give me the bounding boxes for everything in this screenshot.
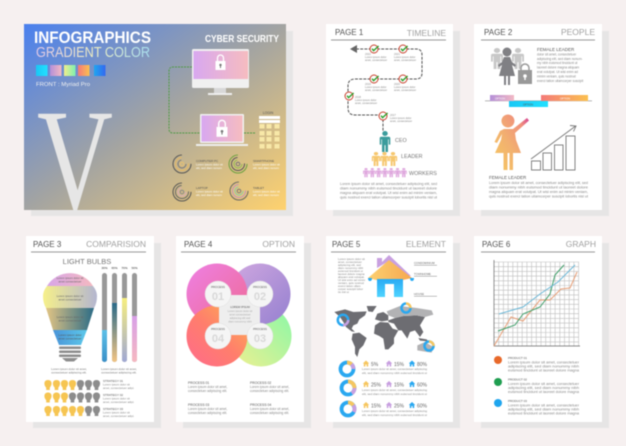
strategy text: amet, consectetuer adipi. [103, 386, 134, 390]
stats row 2: 60% [417, 382, 428, 388]
strategy text: STRATEGY 01 [103, 379, 123, 383]
device item: tablet: Lorem ipsum dolor sit [253, 190, 280, 194]
subtitle: GRADIENT COLOR [36, 45, 150, 61]
timeline captions: Lorem ipsum dolor [394, 85, 416, 89]
heading: light bulbs: LIGHT BULBS [63, 257, 111, 266]
timeline captions: amet, consectetuer [394, 58, 416, 62]
panel: page 2 people [474, 24, 609, 216]
text: female leader caption: magna aliquam erat volutpat. Ut wisi enim ad minim veniam, [489, 190, 588, 194]
text: chart captions [51, 367, 137, 374]
text: chart captions: consectetuer adipiscing elit. [51, 370, 87, 374]
legend: product 03: PRODUCT 03 [508, 399, 527, 403]
text: process 02: consectetuer adipiscing elit. [250, 389, 289, 393]
donut chart: row 3 [342, 402, 355, 416]
four-petal diagram: Lorem ipsum dolor sit [228, 309, 253, 313]
vertical bar chart: 65% [111, 266, 118, 270]
text: female leader: FEMALE LEADER [537, 47, 575, 52]
timeline captions: Lorem ipsum dolor [355, 98, 377, 102]
house labels: TOWNHOME [414, 272, 431, 276]
icon: leader figures [372, 152, 397, 166]
text column: corper suscipit lobor [338, 287, 363, 291]
timeline captions [355, 52, 416, 123]
stats row 1: Lorem ipsum dolor sit amet, consectetuer adipiscing [362, 367, 427, 371]
stats row 2: Lorem ipsum dolor sit amet, consectetuer adipiscing [362, 388, 427, 392]
text block [340, 182, 437, 200]
text column: laoreet dolore magna [338, 272, 365, 276]
text column: exerci tation ullam [338, 284, 361, 288]
text column: diam nonummy nibh [338, 266, 364, 270]
timeline captions: amet, consectetuer [394, 88, 416, 92]
device item: computer pc: Lorem ipsum dolor sit [196, 162, 223, 166]
text: process 03: Lorem ipsum dolor sit amet, [188, 407, 227, 411]
timeline captions: 2018 [355, 95, 361, 99]
legend: product 03: Lorem ipsum dolor sit amet, consectetuer [508, 404, 580, 408]
legend: product 02: Lorem ipsum dolor sit amet, consectetuer [508, 382, 580, 386]
timeline captions: 2021 [394, 52, 400, 56]
four-petal diagram: adipiscing elit sed [230, 316, 251, 320]
device item: computer pc [173, 155, 223, 173]
option bars: OPTION [495, 96, 505, 100]
bulb chart: amet consectetuer [58, 298, 82, 302]
legend: product 01: euismod tincidunt ut laoreet dolore magna [508, 368, 579, 372]
stats row 3: 25% [394, 404, 405, 410]
legend: product 01: Lorem ipsum dolor sit amet, consectetuer [508, 360, 580, 364]
timeline path [348, 49, 422, 131]
heading: graph: GRAPH [566, 239, 596, 249]
colour swatches [36, 65, 106, 76]
timeline captions: 2020 [394, 82, 400, 86]
timeline captions: 2022 [365, 52, 371, 56]
vertical bar chart [101, 266, 138, 362]
text column: aliquam erat volutpat. [338, 275, 365, 279]
text: female leader: my nibh euismod tincidunt ut [537, 61, 578, 65]
stats row 1 [362, 360, 428, 375]
text column: veniam, quis nostrud [338, 281, 364, 285]
icon: female leader group [491, 48, 532, 85]
legend: product 02: euismod tincidunt ut laoreet dolore magna [508, 390, 579, 394]
device item: computer pc: elit, sed diam nonum [196, 166, 222, 170]
text: process 03 [188, 403, 227, 415]
vertical bar chart: 30% [101, 266, 108, 270]
stats row 2: 15% [394, 382, 405, 388]
stats row 3: 15% [371, 404, 382, 410]
dashed connectors [169, 67, 256, 133]
process node 02: PROCESS [253, 285, 267, 289]
panel: page 6 graph [474, 236, 609, 428]
line chart [494, 260, 580, 346]
font note: FRONT : Myriad Pro [36, 82, 90, 88]
icon: laptop [196, 114, 248, 146]
option bars: OPTION [523, 102, 533, 106]
heading: page 3: PAGE 3 [33, 240, 62, 249]
house labels: CONDOMINIUM [414, 261, 435, 265]
process node 02: 02 [254, 291, 266, 303]
stats row 3 [362, 402, 428, 417]
process node 03: PROCESS [253, 327, 267, 331]
panel: page 1 timeline [326, 24, 460, 216]
option bars [485, 95, 592, 107]
text block: Lorem ipsum dolor sit amet, consectetuer adipiscing elit, sed [340, 182, 437, 186]
label: ceo: CEO [395, 138, 407, 144]
stats row 3: elit, sed diam nonummy nibh euismod tincidunt ut [362, 413, 427, 417]
four-petal diagram: LOREM IPSUM [230, 305, 250, 309]
bulb chart: amet consectetuer [58, 280, 82, 284]
four-petal diagram [186, 264, 292, 366]
legend: product 03: euismod tincidunt ut laoreet dolore magna [508, 412, 579, 416]
text: female leader caption: Lorem ipsum dolor sit amet, consectetuer adipiscing elit, sed [489, 181, 588, 185]
bulb chart: Lorem ipsum dolor sit [57, 315, 84, 319]
timeline captions: amet, consectetuer [355, 101, 377, 105]
heading: element: ELEMENT [406, 239, 446, 249]
timeline captions: Lorem ipsum dolor [365, 55, 387, 59]
heading: comparision: COMPARISION [86, 239, 146, 249]
text block: quis nostrud exerci tation ullamcorper suscipit lobortis nisl ut [340, 196, 437, 200]
timeline checkpoints [345, 45, 408, 120]
text column [338, 257, 366, 294]
text: process 01: PROCESS 01 [188, 381, 209, 385]
text: process 01: consectetuer adipiscing elit. [188, 389, 227, 393]
text: female leader: exerci tation ullamcorper suscipit [537, 79, 583, 83]
device item: laptop: LAPTOP [196, 186, 208, 190]
text: female leader caption: FEMALE LEADER [489, 175, 527, 180]
text block: diam nonummy nibh euismod tincidunt ut laoreet dolore [340, 186, 437, 190]
text: female leader caption: diam nonummy nibh euismod tincidunt ut laoreet dolore [489, 186, 588, 190]
stats row 1: 5% [371, 362, 379, 368]
heading: page 4: PAGE 4 [184, 240, 213, 249]
icon: arrow [350, 45, 357, 53]
text column: tis nisl ut [338, 290, 349, 294]
panel: page 4 option [176, 236, 311, 428]
login keypad: LOGIN [263, 111, 274, 115]
device item: smartphone: SMARTPHONE [253, 159, 274, 163]
process node 01 [205, 281, 231, 307]
timeline captions: Lorem ipsum dolor [394, 55, 416, 59]
text column: amet, consectetuer [338, 260, 362, 264]
text: female leader: adipiscing elit, sed diam nonum- [537, 57, 583, 61]
strategy bulb rows [44, 380, 100, 416]
process node 03 [247, 323, 273, 349]
timeline captions: Lorem ipsum dolor [365, 85, 387, 89]
timeline captions: amet, consectetuer [390, 119, 412, 123]
chart: rising bars [531, 126, 576, 170]
title: INFOGRAPHICS [34, 28, 151, 47]
house labels: HOUSE [414, 292, 424, 296]
legend: product 03 [494, 399, 580, 416]
vertical bar chart: 50% [131, 266, 138, 270]
text: female leader: dolor sit amet, consectetuer [537, 52, 577, 56]
bulb chart [43, 273, 97, 362]
device item: computer pc: COMPUTER PC [196, 159, 219, 163]
heading: page 1: PAGE 1 [335, 28, 364, 37]
donut chart: row 2 [342, 382, 355, 394]
text block: magna aliquam erat volutpat. Ut wisi enim ad minim veniam, [340, 191, 437, 195]
text column: Ut wisi enim ad minim [338, 278, 366, 282]
device item: smartphone: Lorem ipsum dolor sit [253, 162, 280, 166]
icon: female figure pointing [494, 114, 529, 170]
timeline captions: Lorem ipsum dolor [390, 116, 412, 120]
text: female leader caption: quis nostrud exerci tation ullamcorper suscipit lobortis nisl ut [489, 194, 588, 198]
icon: worker figures [363, 168, 407, 177]
timeline captions: 2019 [365, 82, 371, 86]
process node 01: PROCESS [211, 285, 225, 289]
timeline captions: amet, consectetuer [365, 88, 387, 92]
text: chart captions: Lorem ipsum dolor sit amet, [51, 367, 87, 371]
four-petal diagram: diam nonummy nibh [228, 320, 252, 324]
icon: house [368, 255, 414, 297]
strategy text: amet, consectetuer adipi. [103, 400, 134, 404]
text: process 03: PROCESS 03 [188, 403, 209, 407]
world map [334, 306, 433, 357]
bulb chart: Lorem ipsum dolor [58, 333, 82, 337]
label: workers: WORKERS [409, 171, 437, 177]
strategy text: Lorem ipsum dolor sit [103, 382, 130, 386]
text: process 03: consectetuer adipiscing elit. [188, 411, 227, 415]
icon: ceo figure [380, 131, 390, 152]
text column: adipiscing elit, sed [338, 263, 361, 267]
device item: smartphone: elit, sed diam nonum [253, 166, 279, 170]
timeline captions: 2017 [390, 113, 396, 117]
heading: page 6: PAGE 6 [482, 240, 511, 249]
stats row 2 [362, 381, 428, 396]
legend: product 03: adipiscing elit, sed diam nonummy nibh [508, 408, 579, 412]
process node 04: 04 [212, 333, 225, 345]
donut chart: row 1 [340, 362, 354, 376]
process node 01: 01 [212, 291, 224, 303]
stats row 1: elit, sed diam nonummy nibh euismod tincidunt ut [362, 371, 427, 375]
legend: product 02: PRODUCT 02 [508, 378, 527, 382]
strategy text: Lorem ipsum dolor sit [103, 410, 130, 414]
stats row 3: Lorem ipsum dolor sit amet, consectetuer adipiscing [362, 409, 427, 413]
device item: tablet [230, 182, 280, 200]
text: process 04 [250, 403, 289, 415]
text: female leader caption [489, 175, 588, 198]
device item: tablet: elit, sed diam nonum [253, 193, 279, 197]
device item: smartphone [229, 155, 280, 173]
panel: cover [24, 24, 293, 242]
timeline captions: amet, consectetuer [365, 58, 387, 62]
device item: laptop: elit, sed diam nonum [196, 193, 222, 197]
bulb chart: Lorem ipsum dolor sit [57, 276, 84, 280]
legend: product 01: PRODUCT 01 [508, 356, 527, 360]
text: chart captions: Lorem ipsum dolor sit amet, [101, 367, 137, 371]
bulb chart: amet consectetuer [58, 336, 82, 340]
legend: product 02: adipiscing elit, sed diam nonummy nibh [508, 386, 579, 390]
text: female leader: laoreet dolore magna aliquam [537, 66, 580, 70]
legend: product 01 [494, 356, 580, 372]
stats row 2: 25% [371, 382, 382, 388]
large letter V: V [37, 79, 113, 242]
process node 03: 03 [254, 333, 266, 345]
house labels [414, 261, 437, 296]
bulb chart: Lorem ipsum dolor sit [57, 294, 84, 298]
text: female leader: erat volutpat. Ut wisi enim ad [537, 70, 578, 74]
strategy text: STRATEGY 02 [103, 393, 123, 397]
text: process 02: PROCESS 02 [250, 381, 271, 385]
icon: desktop monitor [192, 49, 249, 95]
device item: laptop [173, 183, 223, 201]
stats row 2: elit, sed diam nonummy nibh euismod tincidunt ut [362, 392, 427, 396]
text: chart captions: consectetuer adipiscing elit. [101, 370, 137, 374]
bulb chart: amet consectetuer [58, 318, 82, 322]
text: female leader [537, 47, 583, 83]
four-petal diagram: amet consectetuer [229, 312, 251, 316]
heading: cyber security: CYBER SECURITY [205, 33, 279, 45]
panel: page 5 element [326, 236, 460, 428]
legend: product 02 [494, 378, 580, 394]
text: process 04: consectetuer adipiscing elit. [250, 411, 289, 415]
text column: euismod tincidunt ut [338, 269, 363, 273]
heading: page 5: PAGE 5 [332, 240, 361, 249]
process node 02 [247, 281, 273, 307]
heading: people: PEOPLE [561, 27, 595, 37]
device item: laptop: Lorem ipsum dolor sit [196, 190, 223, 194]
map donut markers [338, 304, 434, 350]
strategy text: STRATEGY 03 [103, 407, 123, 411]
heading: page 2: PAGE 2 [484, 28, 513, 37]
panel: page 3 comparison [26, 236, 161, 428]
text: process 02: Lorem ipsum dolor sit amet, [250, 385, 289, 389]
stats row 1: 15% [394, 362, 405, 368]
legend: product 01: adipiscing elit, sed diam nonummy nibh [508, 364, 579, 368]
text: process 01: Lorem ipsum dolor sit amet, [188, 385, 227, 389]
heading: timeline: TIMELINE [407, 28, 446, 38]
option bars: OPTION [560, 96, 570, 100]
heading: option: OPTION [262, 239, 295, 249]
text: process 01 [188, 381, 227, 393]
strategy text [103, 379, 134, 418]
text: female leader: minim veniam, quis nostrud [537, 74, 576, 78]
label: leader: LEADER [401, 154, 423, 160]
stats row 3: 60% [417, 404, 428, 410]
text: process 04: Lorem ipsum dolor sit amet, [250, 407, 289, 411]
text column: Lorem ipsum dolor sit [338, 257, 365, 261]
process node 04 [205, 323, 231, 349]
text: process 02 [250, 381, 289, 393]
strategy text: amet, consectetuer adipi. [103, 414, 134, 418]
process node 04: PROCESS [211, 327, 225, 331]
stats row 1: 80% [417, 362, 428, 368]
strategy text: Lorem ipsum dolor sit [103, 396, 130, 400]
vertical bar chart: 70% [121, 266, 128, 270]
text: process 04: PROCESS 04 [250, 403, 271, 407]
login keypad [259, 111, 280, 148]
device item: tablet: TABLET [253, 186, 264, 190]
